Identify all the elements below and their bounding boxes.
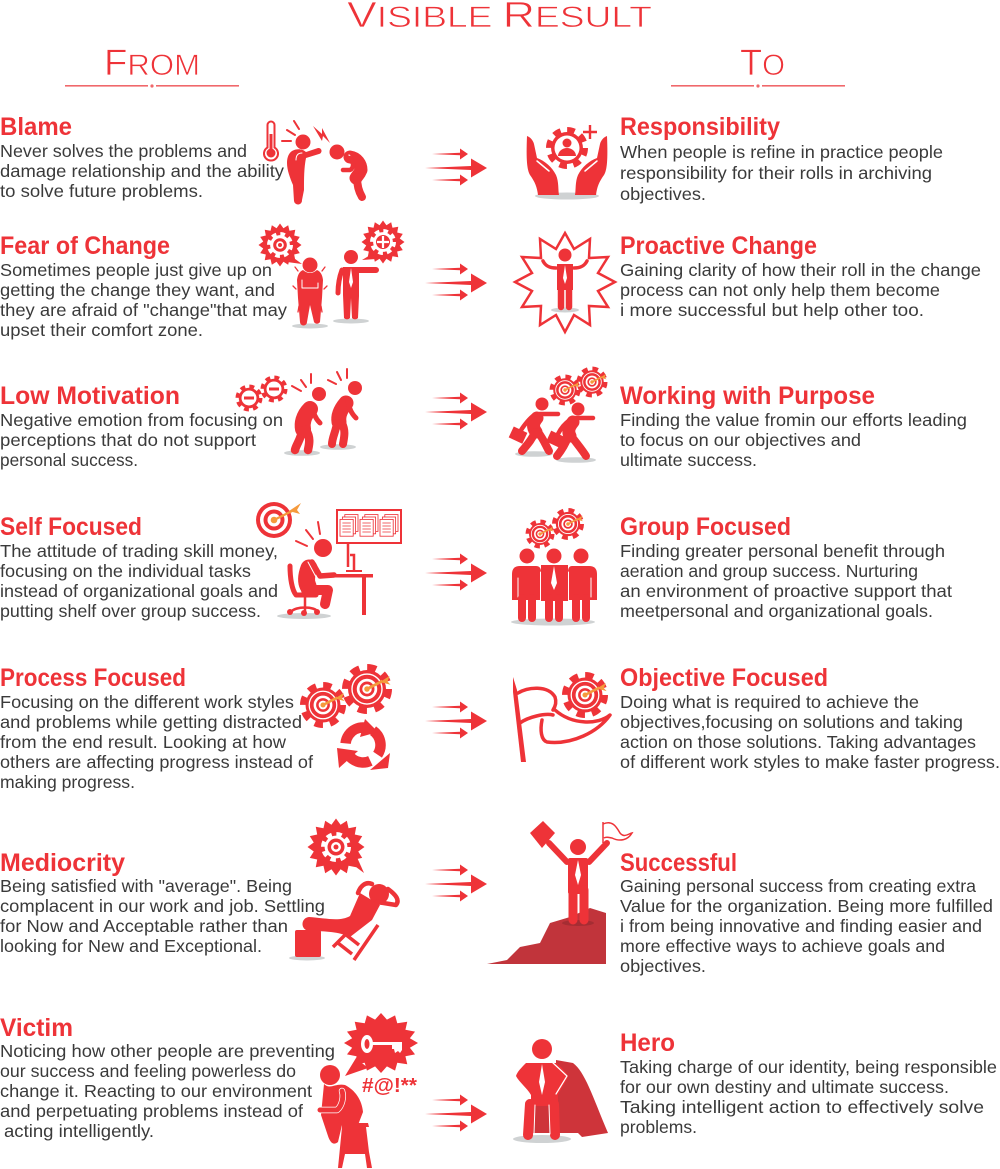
text: Low Motivation description <box>0 410 283 470</box>
text: Group Focused description: an environment of proactive support that <box>620 581 952 601</box>
text: Process Focused description: and problems while getting distracted <box>0 712 302 732</box>
text: Self Focused description: focusing on the individual tasks <box>0 561 251 581</box>
heading: Self Focused: Self Focused <box>0 513 142 541</box>
text: Responsibility description: When people is refine in practice people <box>620 142 943 162</box>
text: Self Focused description: instead of organizational goals and <box>0 581 278 601</box>
text: Victim description <box>0 1041 335 1141</box>
heading: Proactive Change: Proactive Change <box>620 232 817 260</box>
heading: From column <box>65 42 239 88</box>
heading: Objective Focused: Objective Focused <box>620 664 828 692</box>
text: Blame description: Never solves the problems and <box>0 141 247 161</box>
text: Low Motivation description: personal success. <box>0 450 138 470</box>
text: Fear of Change description: upset their comfort zone. <box>0 320 203 340</box>
text: Victim description: our success and feeling powerless do <box>0 1061 296 1081</box>
text: Proactive Change description: i more successful but help other too. <box>620 300 924 320</box>
text: Self Focused description: The attitude of trading skill money, <box>0 541 278 561</box>
text: Successful description <box>620 876 993 976</box>
heading: Process Focused: Process Focused <box>0 664 186 692</box>
heading: Low Motivation: Low Motivation <box>0 382 180 410</box>
text: Blame description: damage relationship and the ability <box>0 161 284 181</box>
text: Blame description <box>0 141 284 201</box>
heading: From column: FROM <box>104 42 200 83</box>
text: Responsibility description <box>620 142 943 204</box>
text: Successful description: Gaining personal success from creating extra <box>620 876 976 896</box>
icon: flag with target gear <box>513 676 610 762</box>
text: Successful description: more effective ways to achieve goals and <box>620 936 945 956</box>
arrows: Blame to Responsibility <box>425 148 487 186</box>
text: Successful description: i from being innovative and finding easier and <box>620 916 982 936</box>
text: Process Focused description: Focusing on the different work styles <box>0 692 294 712</box>
text: Group Focused description: aeration and group success. Nurturing <box>620 561 918 581</box>
text: Mediocrity description: complacent in our work and job. Settling <box>0 896 325 916</box>
panel: Objective Focused <box>513 664 1000 772</box>
heading: Victim: Victim <box>0 1014 73 1042</box>
text: Fear of Change description <box>0 260 287 340</box>
panel: Group Focused <box>511 511 952 626</box>
icon: hands holding gear with person <box>527 125 607 200</box>
icon: two people arguing with thermometer <box>264 121 362 205</box>
icon: worried and confident people with gear bursts <box>258 220 404 328</box>
text: Low Motivation description: Negative emotion from focusing on <box>0 410 283 430</box>
text: Responsibility description: responsibility for their rolls in archiving <box>620 163 932 183</box>
text: Victim description: acting intelligently. <box>4 1121 154 1141</box>
text: Working with Purpose description: ultimate success. <box>620 450 757 470</box>
heading: Fear of Change: Fear of Change <box>0 232 170 260</box>
text: Proactive Change description <box>620 260 981 320</box>
icon: person in starburst <box>515 233 615 332</box>
text: Fear of Change description: Sometimes people just give up on <box>0 260 272 280</box>
panel: Hero <box>513 1029 997 1143</box>
arrows: Mediocrity to Successful <box>425 864 487 902</box>
text: Victim description: change it. Reacting to our environment <box>0 1081 312 1101</box>
text: Fear of Change description: they are afraid of "change"that may <box>0 300 287 320</box>
panel: Blame <box>0 113 362 205</box>
text: Self Focused description: putting shelf over group success. <box>0 601 261 621</box>
text: Hero description: for our own destiny and ultimate success. <box>620 1077 949 1097</box>
text: Hero description: problems. <box>620 1117 697 1137</box>
text: Hero description <box>620 1057 997 1137</box>
icon: person at desk with target and documents <box>256 502 401 619</box>
arrows: Self Focused to Group Focused <box>425 554 487 590</box>
heading: Working with Purpose: Working with Purpose <box>620 382 875 410</box>
panel: Proactive Change <box>515 232 981 332</box>
panel: Low Motivation <box>0 369 362 470</box>
text: Low Motivation description: perceptions that do not support <box>0 430 256 450</box>
text: Mediocrity description: looking for New and Exceptional. <box>0 936 262 956</box>
heading: Mediocrity: Mediocrity <box>0 849 125 877</box>
text: Successful description: objectives. <box>620 956 706 976</box>
text: Process Focused description <box>0 692 313 792</box>
heading: Responsibility: Responsibility <box>620 113 780 141</box>
heading: To column <box>671 42 845 88</box>
icon: seated frustrated person with key burst <box>320 1013 418 1168</box>
text: Objective Focused description <box>620 692 1000 772</box>
arrows: Process Focused to Objective Focused <box>425 702 487 738</box>
panel: Working with Purpose <box>509 369 967 470</box>
text: Blame description: to solve future problems. <box>0 181 203 201</box>
text: Process Focused description: others are affecting progress instead of <box>0 752 313 772</box>
text: Victim description: Noticing how other people are preventing <box>0 1041 335 1061</box>
text: Hero description: Taking intelligent action to effectively solve <box>620 1097 984 1117</box>
text: Successful description: Value for the organization. Being more fulfilled <box>620 896 993 916</box>
text: Proactive Change description: Gaining clarity of how their roll in the change <box>620 260 981 280</box>
icon: superhero with cape <box>513 1039 608 1143</box>
panel: Successful <box>487 821 993 976</box>
heading: Blame: Blame <box>0 113 72 141</box>
panel: Self Focused <box>0 502 401 621</box>
icon: three people with target gears <box>511 511 597 626</box>
text: Mediocrity description: for Now and Acceptable rather than <box>0 916 288 936</box>
text: Objective Focused description: Doing what is required to achieve the <box>620 692 919 712</box>
heading: Successful: Successful <box>620 849 737 877</box>
text: Proactive Change description: process can not only help them become <box>620 280 940 300</box>
icon: person on mountain with flag <box>487 821 632 964</box>
panel: Responsibility <box>527 113 943 204</box>
heading: Group Focused: Group Focused <box>620 513 791 541</box>
icon: target gears and cycle arrows <box>304 668 390 770</box>
text: Mediocrity description: Being satisfied with "average". Being <box>0 876 292 896</box>
text: Self Focused description <box>0 541 278 621</box>
arrows: Low Motivation to Working with Purpose <box>425 392 487 430</box>
arrows: Victim to Hero <box>425 1094 487 1132</box>
icon: two slumped people with minus gears <box>238 369 362 456</box>
text: Objective Focused description: action on those solutions. Taking advantages <box>620 732 976 752</box>
text: Group Focused description: Finding greater personal benefit through <box>620 541 945 561</box>
text: Fear of Change description: getting the change they want, and <box>0 280 275 300</box>
arrows: Fear of Change to Proactive Change <box>425 264 487 300</box>
icon: relaxed person reclining with gear burst <box>289 818 398 960</box>
heading: Hero: Hero <box>620 1029 675 1057</box>
panel: Fear of Change <box>0 220 404 340</box>
text: Mediocrity description <box>0 876 325 956</box>
panel: Mediocrity <box>0 818 398 960</box>
text: Victim description: and perpetuating problems instead of <box>0 1101 303 1121</box>
text: Working with Purpose description <box>620 410 967 470</box>
text: Working with Purpose description: to focus on our objectives and <box>620 430 861 450</box>
panel: Process Focused <box>0 664 390 792</box>
icon: two people walking with briefcases and target gears <box>509 369 607 463</box>
text: Process Focused description: making progress. <box>0 772 135 792</box>
text: Responsibility description: objectives. <box>620 184 706 204</box>
text: Process Focused description: from the end result. Looking at how <box>0 732 286 752</box>
text: Working with Purpose description: Finding the value fromin our efforts leading <box>620 410 967 430</box>
text: Hero description: Taking charge of our identity, being responsible <box>620 1057 997 1077</box>
text: Group Focused description: meetpersonal and organizational goals. <box>620 601 933 621</box>
exclamation symbols: #@!** <box>362 1075 417 1097</box>
panel: Victim <box>0 1013 418 1168</box>
text: Group Focused description <box>620 541 952 621</box>
text: Objective Focused description: objectives,focusing on solutions and taking <box>620 712 963 732</box>
heading: To column: TO <box>740 42 785 83</box>
text: Objective Focused description: of different work styles to make faster progress. <box>620 752 1000 772</box>
